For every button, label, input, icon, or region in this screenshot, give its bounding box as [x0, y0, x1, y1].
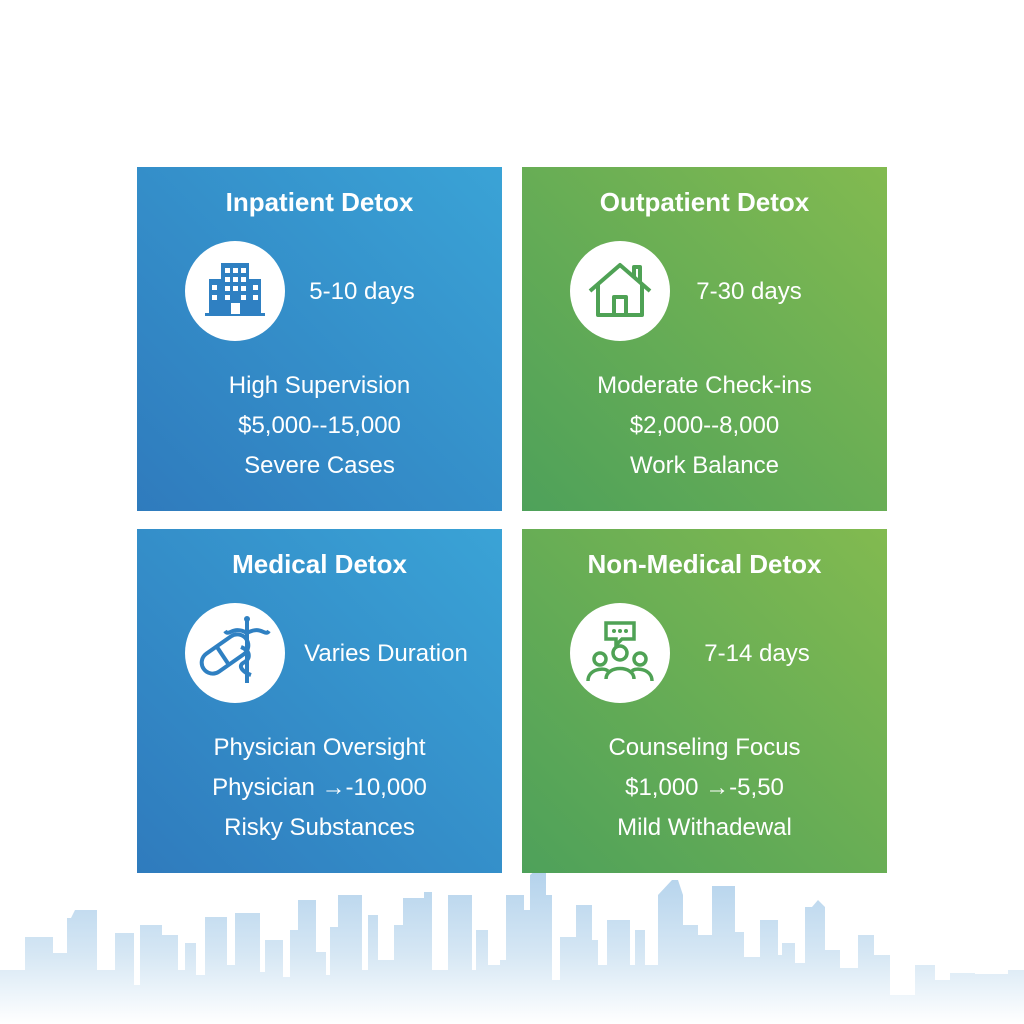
- heading: medical: Medical Detox: [232, 549, 407, 579]
- details: $2,000--8,000: [630, 412, 779, 439]
- details: Physician Oversight: [213, 734, 426, 761]
- panel: non-medical detox: [522, 529, 887, 873]
- details: [229, 372, 410, 479]
- icon: house: [570, 241, 670, 341]
- duration: 5-10 days: [309, 278, 415, 305]
- details: Risky Substances: [224, 814, 415, 841]
- duration: Varies Duration: [304, 640, 468, 667]
- details: [597, 372, 812, 479]
- duration: 7-30 days: [696, 278, 802, 305]
- heading: non-medical: Non-Medical Detox: [587, 549, 822, 579]
- details: [212, 734, 427, 841]
- details: [608, 734, 801, 841]
- icon: group with speech bubble: [570, 603, 670, 703]
- details: Counseling Focus: [608, 734, 801, 761]
- duration: 7-14 days: [704, 640, 810, 667]
- heading: outpatient: Outpatient Detox: [600, 187, 809, 217]
- icon: hospital building: [185, 241, 285, 341]
- panel: inpatient detox: [137, 167, 502, 511]
- panel: outpatient detox: [522, 167, 887, 511]
- heading: inpatient: Inpatient Detox: [226, 187, 413, 217]
- panel: medical detox: [137, 529, 502, 873]
- icon: pill and caduceus: [185, 603, 285, 703]
- details: Moderate Check-ins: [597, 372, 812, 399]
- details: $5,000--15,000: [238, 412, 401, 439]
- details: Physician →-10,000: [212, 774, 427, 801]
- details: Mild Withadewal: [617, 814, 792, 841]
- skyline: [0, 873, 1024, 1010]
- details: Severe Cases: [244, 452, 395, 479]
- details: Work Balance: [630, 452, 779, 479]
- details: $1,000 →-5,50: [625, 774, 784, 801]
- details: High Supervision: [229, 372, 410, 399]
